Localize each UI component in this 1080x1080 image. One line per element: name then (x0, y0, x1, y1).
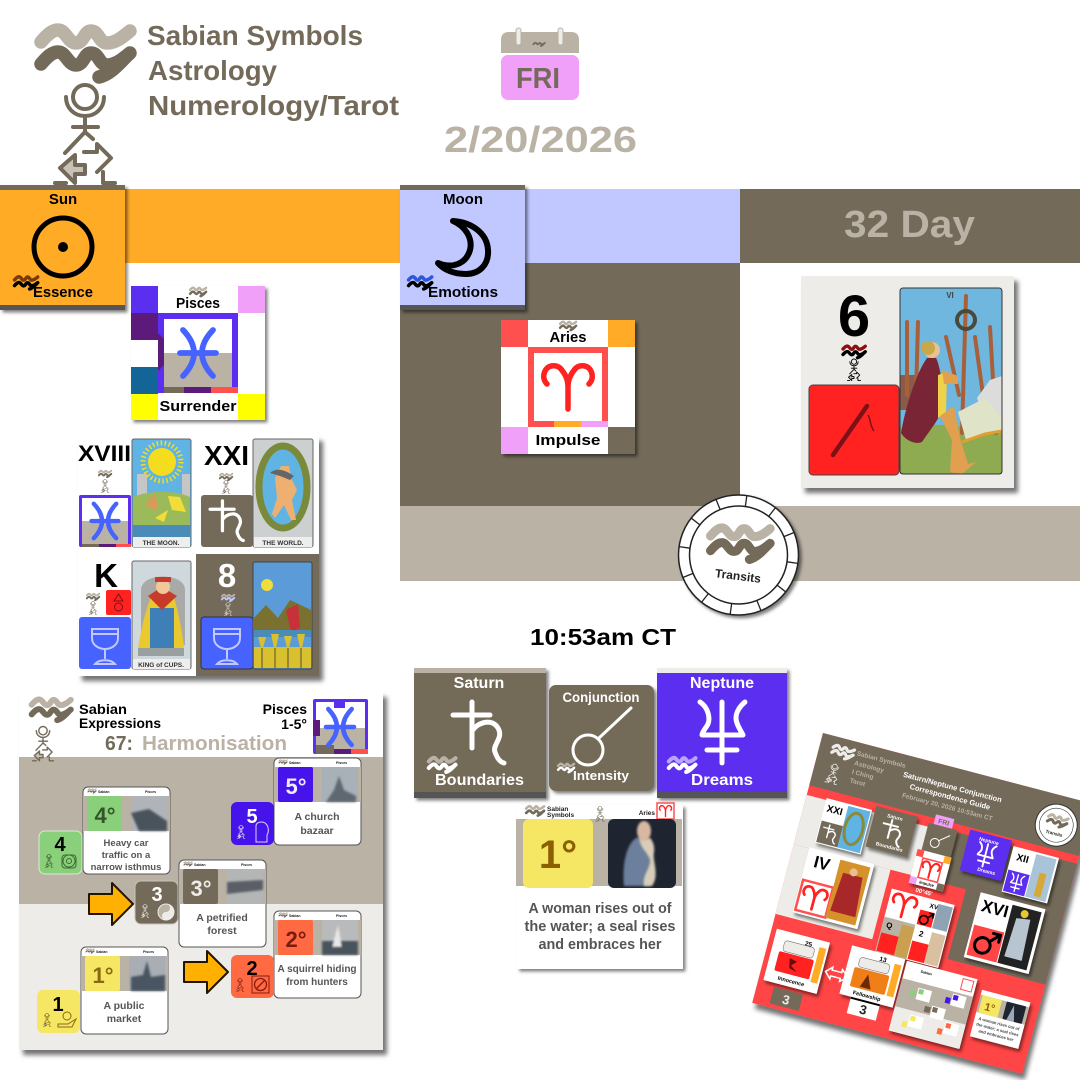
expressions heading: 1-5° (281, 716, 307, 732)
panel: saturn (414, 668, 546, 798)
the moon block (78, 439, 191, 547)
icon: wand tile (809, 385, 899, 475)
panel: sabian symbol card: Sabian (547, 806, 568, 813)
thumbnail: conjunction correspondence guide (752, 733, 1080, 1074)
card: 3 degrees: A petrified (196, 912, 248, 924)
thumbnail hexagram card 13: Fellowship (852, 990, 882, 1003)
thumbnail XVI card: XVI (979, 896, 1011, 922)
tile: 5 (231, 802, 274, 845)
thumbnail aries block: 2 (918, 929, 925, 939)
the world block: XXI (204, 440, 249, 471)
thumbnail conjunction and date: FRI (937, 818, 950, 828)
panel: aries card: Aries (550, 329, 586, 346)
king of cups block: K (94, 557, 118, 594)
thumbnail trigram tile 3 (770, 987, 803, 1011)
panel: sabian symbol card: A woman rises out of (528, 900, 672, 917)
card: 1 degree: A public (103, 1000, 145, 1012)
card: 4 degrees (83, 787, 170, 874)
panel: sabian symbol card: Symbols (547, 812, 574, 819)
thumbnail heading: Correspondence Guide (909, 782, 991, 812)
panel: sabian symbol card: the water; a seal rises (524, 918, 676, 935)
background bands (0, 189, 1080, 581)
eight of cups block: 8 (218, 557, 236, 594)
title: Astrology (148, 55, 278, 86)
thumbnail aries card: Impulse (919, 879, 935, 888)
card: 2 degrees: A squirrel hiding (277, 964, 357, 975)
tile: 2: 2 (246, 958, 258, 980)
image: woman and seal (608, 819, 676, 888)
panel: pisces card: Surrender (160, 398, 237, 415)
card: 5 degrees: 5° (285, 774, 307, 799)
thumbnail XII card: XII (1015, 852, 1030, 866)
thumbnail sabian expressions (889, 961, 978, 1049)
panel: sabian symbol card (516, 803, 683, 969)
thumbnail heading: Saturn/Neptune Conjunction (902, 770, 1003, 804)
thumbnail heading: Astrology (853, 760, 885, 775)
thumbnail sabian card (970, 990, 1030, 1049)
header logo (41, 30, 130, 183)
thumbnail XXI card: XXI (825, 804, 844, 818)
card: 1 degree: Pisces (143, 950, 154, 954)
the world block (201, 439, 313, 547)
icon: calendar FRI (501, 28, 579, 100)
card: 5 degrees: Pisces (336, 761, 347, 765)
day label: 32 Day (844, 204, 975, 246)
panel: sun (0, 185, 125, 310)
thumbnail aries card (909, 849, 952, 892)
thumbnail heading: I Ching (851, 769, 874, 781)
card: 4 degrees: Pisces (145, 790, 156, 794)
thumbnail transits badge: Transits (1045, 829, 1064, 838)
icon: transits badge: Transits (714, 566, 762, 586)
the moon block: THE MOON. (143, 540, 180, 547)
time label: 10:53am CT (530, 624, 676, 650)
thumbnail XVI card (964, 892, 1046, 974)
panel: sun: Essence (33, 284, 93, 301)
card: 4 degrees: traffic on a (102, 850, 151, 861)
panel: pisces card: Pisces (176, 295, 220, 312)
thumbnail IV card (793, 847, 874, 929)
thumbnail hexagram card 13 (839, 945, 905, 1008)
thumbnail heading (824, 744, 1005, 826)
eight of cups block (201, 557, 312, 669)
tile: 4 (39, 831, 82, 874)
thumbnail hexagram card 13: 13 (879, 956, 888, 965)
card: 1 degree: market (107, 1013, 142, 1025)
panel: conjunction: Conjunction (562, 690, 640, 705)
tile: 3: 3 (151, 884, 163, 906)
thumbnail aries block (875, 889, 955, 968)
panel: moon: Emotions (428, 284, 498, 301)
thumbnail trigram tile 3 white: 3 (858, 1002, 868, 1018)
thumbnail trigram tile 3 white (847, 997, 880, 1021)
thumbnail hexagram card 25 (763, 929, 830, 994)
panel: tarot grid (78, 436, 319, 676)
panel: sabian symbol card: and embraces her (538, 936, 662, 953)
card: 5 degrees: bazaar (300, 825, 334, 837)
tarot card: six of wands: VI (946, 291, 954, 300)
icon: pisces decan box (313, 699, 368, 754)
expressions heading: 67: (105, 733, 133, 755)
panel: neptune: Neptune (690, 675, 754, 692)
card: 2 degrees: Sabian (289, 914, 300, 918)
card: 2 degrees (274, 911, 361, 998)
thumbnail sabian card: 1° (983, 1001, 996, 1015)
thumbnail IV card: IV (812, 852, 833, 875)
card: 4 degrees: 4° (94, 803, 116, 828)
icon: transits badge (678, 495, 798, 615)
panel: neptune (657, 668, 787, 798)
thumbnail aries block: Q (885, 920, 893, 931)
king of cups block: KING of CUPS. (138, 662, 184, 669)
panel: moon: Moon (443, 191, 483, 208)
thumbnail saturn tile: Saturn (886, 813, 903, 823)
thumbnail heading: Sabian Symbols (856, 750, 907, 770)
card: 3 degrees: 3° (190, 876, 212, 901)
thumbnail saturn tile (866, 806, 918, 857)
card: 4 degrees: Sabian (98, 790, 109, 794)
arrow: to tile 3 (89, 883, 133, 925)
card: 2 degrees: from hunters (286, 977, 348, 988)
thumbnail transits badge (1031, 800, 1080, 851)
king of cups block (79, 557, 191, 669)
card: 1 degree: Sabian (96, 950, 107, 954)
the world block: THE WORLD. (262, 540, 304, 547)
thumbnail neptune tile: Dreams (976, 867, 996, 877)
expressions heading: Pisces (263, 701, 307, 717)
panel: saturn: Saturn (454, 675, 504, 692)
card: 3 degrees: forest (207, 925, 237, 937)
thumbnail neptune tile: Neptune (978, 836, 1000, 847)
tile: one degree: 1° (539, 833, 577, 877)
panel: neptune: Dreams (691, 772, 753, 789)
thumbnail orb label: 00°45' (915, 888, 933, 898)
title (147, 20, 399, 121)
thumbnail heading: Tarot (849, 777, 867, 788)
panel: sabian symbol card: Aries (639, 810, 655, 817)
thumbnail sabian card: the water; a seal rises (976, 1022, 1020, 1038)
icon: sun glyph (34, 218, 92, 276)
panel: pisces card (131, 286, 265, 420)
thumbnail trigram tile 3: 3 (781, 992, 791, 1008)
expressions heading: Harmonisation (142, 733, 287, 755)
tile: 1 (37, 990, 80, 1033)
thumbnail XXI card (815, 798, 872, 854)
title: Numerology/Tarot (148, 90, 399, 121)
thumbnail sabian card: A woman rises out of (978, 1016, 1021, 1032)
panel: conjunction: Intensity (573, 768, 630, 783)
thumbnail hexagram card 25: Innocence (777, 976, 805, 988)
expressions heading (32, 699, 307, 761)
card: 4 degrees: Heavy car (104, 838, 149, 849)
icon: moon glyph (438, 221, 488, 274)
thumbnail aries block: XVII (929, 903, 942, 913)
tile: 2 (231, 955, 274, 998)
panel: aries card: Impulse (536, 432, 600, 449)
card: 5 degrees (274, 758, 361, 845)
arrow: to tile 2 (184, 951, 228, 993)
thumbnail hexagram card 25: 25 (804, 940, 813, 949)
card: 3 degrees (179, 860, 266, 947)
card: 2 degrees: 2° (285, 927, 307, 952)
tile: 1: 1 (52, 994, 64, 1016)
title: Sabian Symbols (147, 20, 363, 51)
tile: 5: 5 (246, 806, 258, 828)
card: 3 degrees: Sabian (194, 863, 205, 867)
date: 2/20/2026 (444, 119, 637, 160)
thumbnail neptune tile (960, 830, 1012, 881)
thumbnail sabian expressions: Sabian (920, 970, 932, 976)
thumbnail saturn tile: Boundaries (875, 841, 903, 854)
panel: sabian expressions (19, 692, 383, 1050)
card: 2 degrees: Pisces (336, 914, 347, 918)
tile: 4: 4 (54, 834, 66, 856)
card: 5 degrees: Sabian (289, 761, 300, 765)
card: 4 degrees: narrow isthmus (91, 862, 161, 873)
card: 1 degree (81, 947, 168, 1034)
tile: 3 (135, 881, 178, 924)
tile: one degree (523, 819, 593, 888)
panel: sun: Sun (49, 191, 77, 208)
card: 3 degrees: Pisces (241, 863, 252, 867)
thumbnail heading: February 20, 2026 10:53am CT (901, 792, 993, 823)
expressions heading: Sabian (79, 701, 127, 717)
icon: calendar FRI: FRI (516, 63, 560, 95)
tarot card: six of wands (900, 288, 1002, 474)
panel: moon (400, 185, 525, 310)
panel: conjunction (549, 685, 654, 791)
arrow: thumbnail double arrow (824, 966, 849, 983)
the moon block: XVIII (78, 441, 131, 466)
thumbnail conjunction and date (921, 813, 960, 859)
expressions heading: Expressions (79, 715, 161, 731)
thumbnail sabian card: and embraces her (978, 1028, 1014, 1042)
panel: saturn: Boundaries (435, 772, 524, 789)
panel: six of wands card (801, 276, 1014, 488)
card: 1 degree: 1° (92, 963, 114, 988)
panel: six of wands card: 6 (838, 284, 870, 349)
card: 5 degrees: A church (294, 811, 340, 823)
panel: aries card (501, 320, 635, 454)
thumbnail XII card (1002, 846, 1059, 903)
